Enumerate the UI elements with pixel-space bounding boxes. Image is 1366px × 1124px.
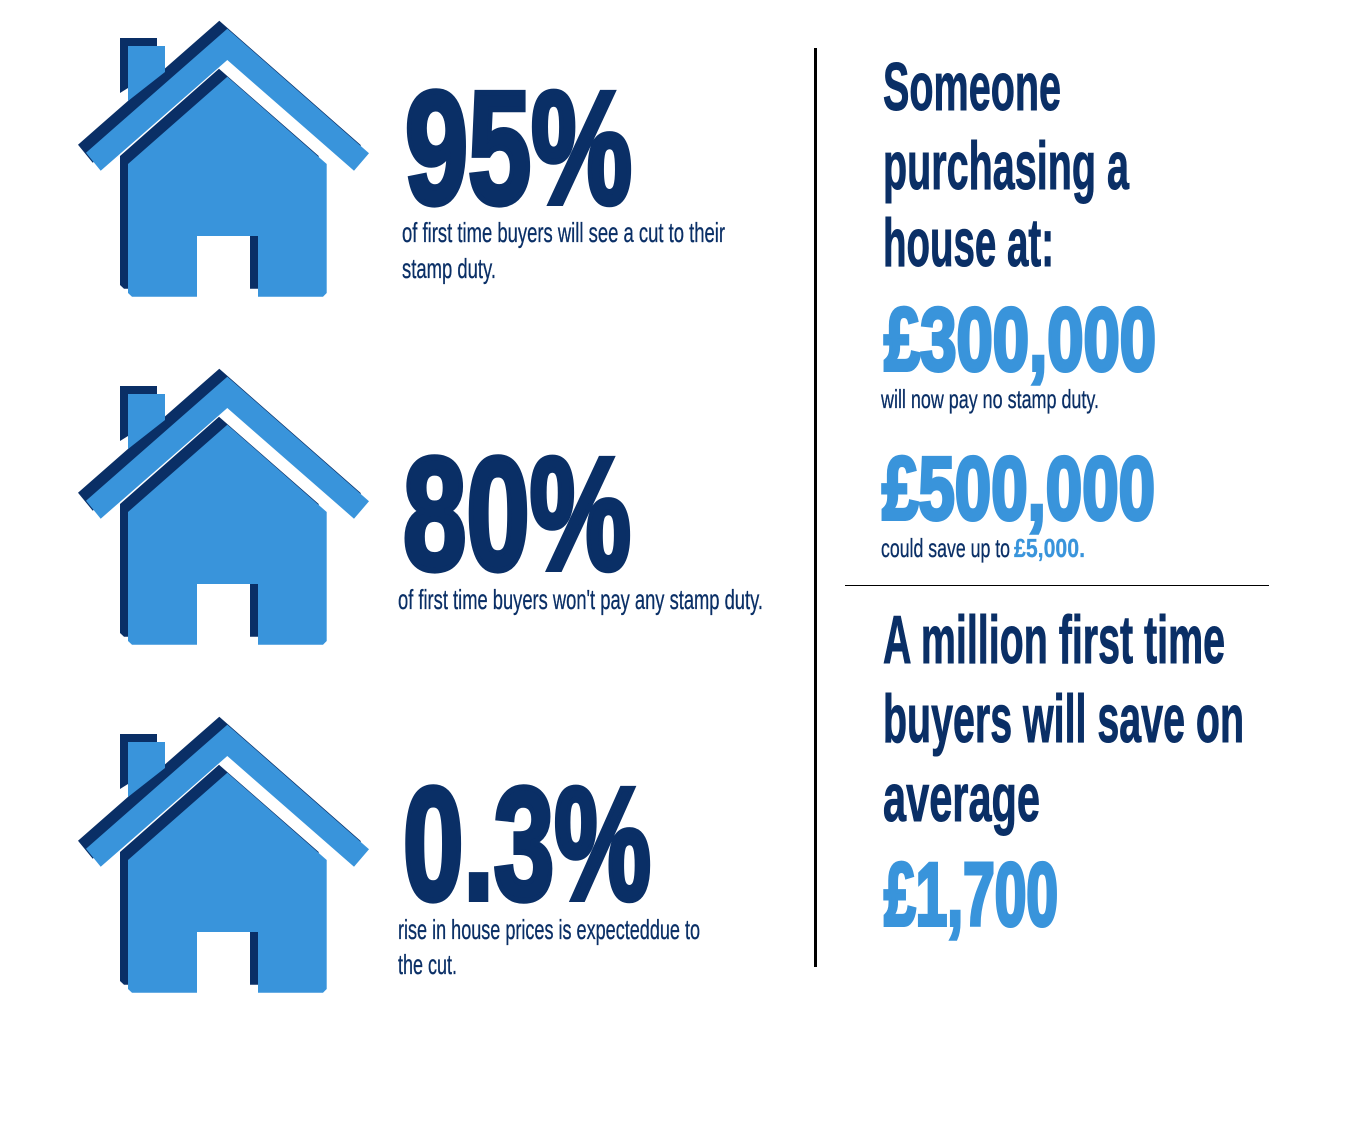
statistic: 95%: 95%: [405, 58, 632, 237]
price: 1,700: £1,700: [884, 844, 1058, 944]
description 1: [402, 217, 725, 284]
statistic: 80%: 80%: [403, 424, 631, 603]
description 1: of first time buyers will see a cut to their: [402, 217, 725, 248]
statistic: 0.3%: 0.3%: [403, 754, 651, 933]
heading: a million first time buyers: average: [883, 760, 1040, 836]
note: could save: £5,000.: [1014, 533, 1085, 563]
house icon 3: [78, 717, 369, 993]
note: could save: could save up to: [881, 533, 1010, 563]
price: 300,000: £300,000: [884, 289, 1156, 389]
description 3: rise in house prices is expecteddue to: [398, 914, 700, 945]
description 3: [398, 914, 700, 980]
description 1: stamp duty.: [402, 253, 496, 284]
price: 500,000: £500,000: [882, 438, 1155, 538]
heading: someone purchasing: house at:: [883, 205, 1054, 281]
house icon 1: [78, 21, 369, 297]
heading: someone purchasing: purchasing a: [883, 128, 1130, 204]
heading: a million first time buyers: [883, 602, 1244, 836]
description 3: the cut.: [398, 949, 457, 980]
note: no stamp duty: will now pay no stamp duty.: [880, 384, 1099, 414]
horizontal divider: [845, 585, 1269, 586]
heading: someone purchasing: [883, 49, 1130, 281]
house icon 2: [78, 369, 369, 645]
heading: someone purchasing: Someone: [883, 49, 1061, 125]
vertical divider: [814, 48, 817, 967]
description 2: of first time buyers won't pay any stamp duty.: [398, 584, 763, 615]
